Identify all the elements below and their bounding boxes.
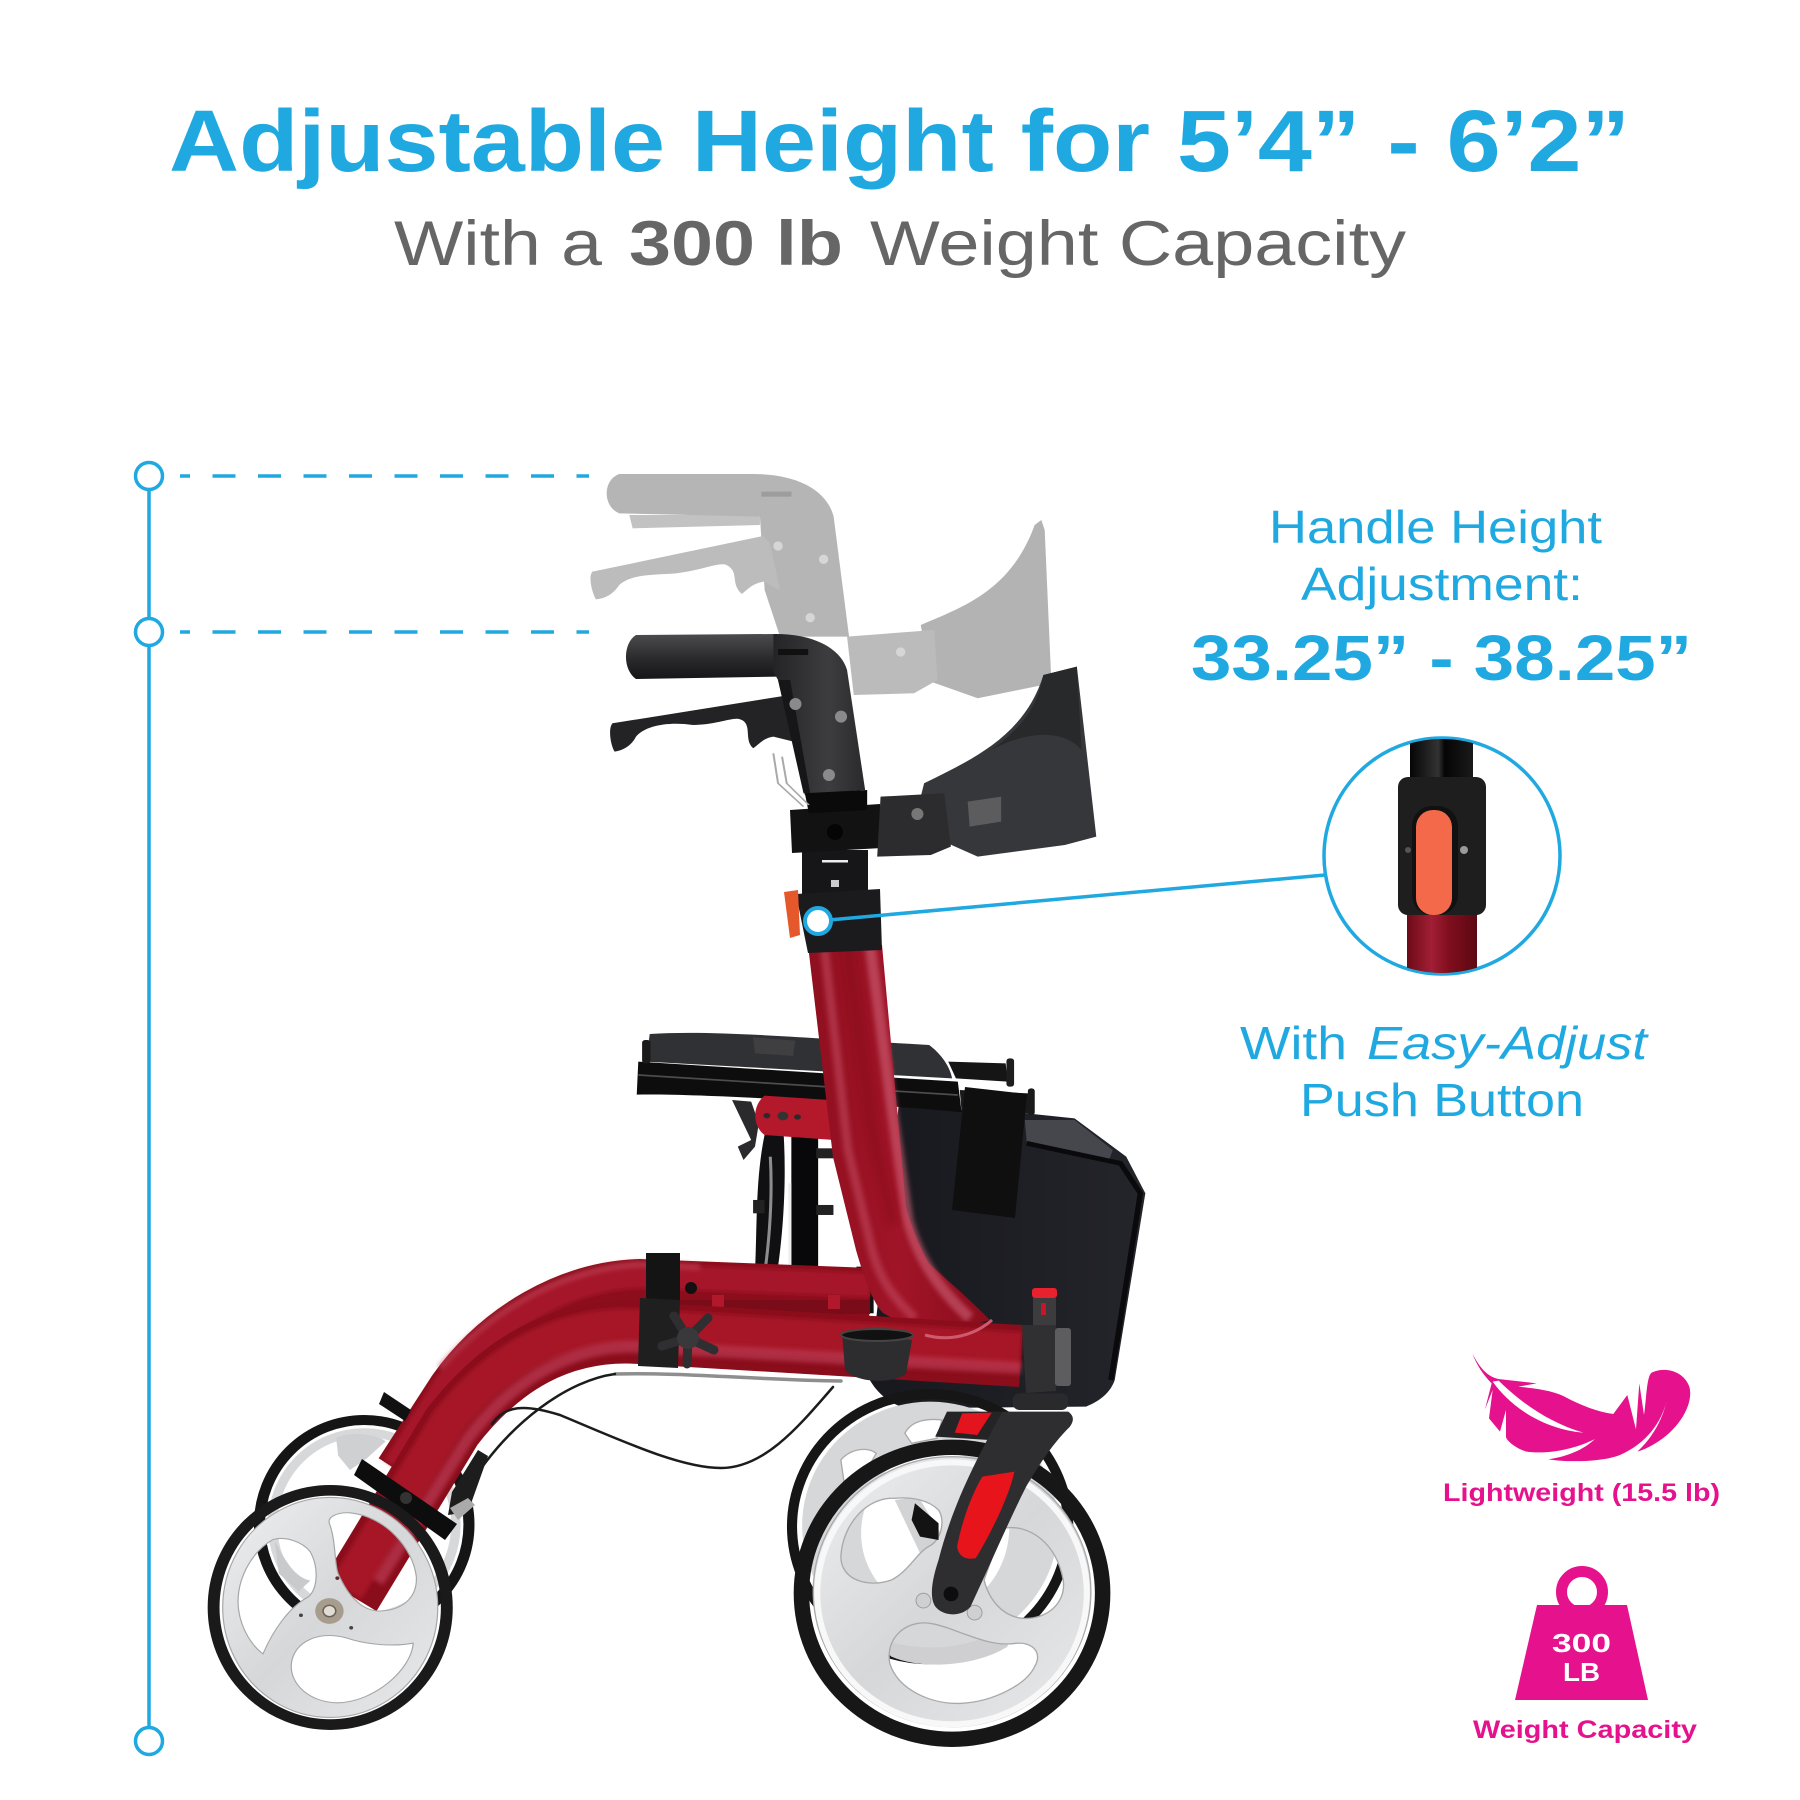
handle bbox=[610, 634, 867, 813]
icon: weight bbox=[1515, 1572, 1648, 1700]
push button text: With bbox=[1240, 1017, 1347, 1069]
backrest bbox=[877, 667, 1096, 857]
fork ring bbox=[1013, 1393, 1068, 1410]
brake cables bbox=[468, 1374, 841, 1488]
far frame tube bbox=[395, 1264, 870, 1474]
brake lever bbox=[610, 696, 800, 752]
subtitle: With a bbox=[394, 209, 603, 279]
near rear wheel and fork bbox=[801, 1393, 1103, 1739]
seat bracket bbox=[755, 1096, 834, 1140]
ghost raised handle bbox=[590, 474, 1051, 698]
rear brake unit bbox=[1022, 1288, 1071, 1393]
far front wheel bbox=[259, 1420, 469, 1629]
subtitle: Weight Capacity bbox=[870, 209, 1407, 279]
push button inset bbox=[1324, 730, 1560, 980]
icon: feather bbox=[1472, 1353, 1690, 1461]
near fork bbox=[932, 1412, 1073, 1614]
near frame tube bbox=[346, 1320, 1021, 1595]
fork bolt bbox=[944, 1587, 958, 1601]
seat bbox=[637, 1033, 1035, 1115]
far rear wheel bbox=[792, 1394, 1068, 1665]
icon: weight: LB bbox=[1563, 1657, 1600, 1687]
handle height text: Handle Height bbox=[1269, 501, 1602, 553]
handle height text: 33.25” - 38.25” bbox=[1191, 622, 1692, 694]
height scale with dashed markers bbox=[136, 462, 589, 1754]
bag strap bbox=[952, 1087, 1027, 1218]
storage bag bbox=[870, 1107, 1145, 1408]
walker product illustration bbox=[214, 634, 1145, 1739]
grip bbox=[626, 634, 778, 679]
weight capacity label: Weight Capacity bbox=[1473, 1716, 1697, 1744]
title: Adjustable Height for 5’4” - 6’2” bbox=[169, 93, 1630, 190]
reflector bbox=[957, 1472, 1014, 1559]
callout leader line bbox=[818, 875, 1325, 921]
folding legs bbox=[732, 1100, 874, 1313]
far fork bbox=[935, 1412, 1003, 1440]
push button text bbox=[1240, 1017, 1650, 1126]
front clamp assembly bbox=[354, 1392, 488, 1540]
icon: weight: 300 bbox=[1552, 1628, 1611, 1658]
handle height text bbox=[1191, 501, 1692, 694]
subtitle bbox=[394, 209, 1407, 279]
near wheel tire and rim bbox=[801, 1447, 1103, 1739]
handle height text: Adjustment: bbox=[1301, 558, 1583, 610]
near front wheel bbox=[214, 1490, 447, 1725]
push button text: Push Button bbox=[1300, 1074, 1584, 1126]
cup holder bbox=[841, 1329, 913, 1381]
frame clamps and star knob bbox=[638, 1253, 714, 1368]
lightweight label: Lightweight (15.5 lb) bbox=[1443, 1479, 1720, 1507]
elbow bbox=[773, 634, 865, 795]
height post and clamp bbox=[784, 804, 882, 953]
subtitle: 300 lb bbox=[629, 209, 843, 279]
upright red tube bbox=[808, 945, 990, 1336]
push button text: Easy-Adjust bbox=[1367, 1017, 1650, 1069]
callout dot bbox=[805, 908, 831, 934]
